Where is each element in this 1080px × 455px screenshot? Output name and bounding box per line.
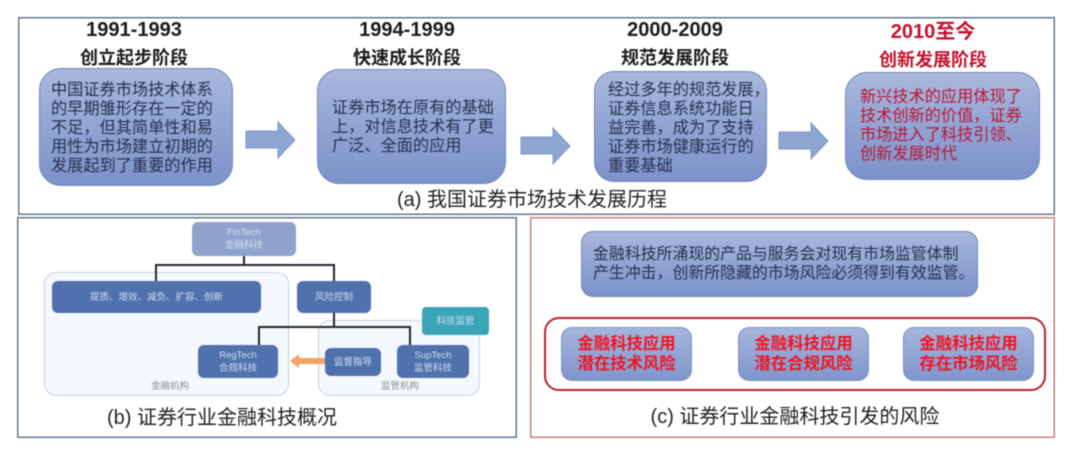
box: FinTech: FinTech	[227, 227, 261, 238]
text box: stage 3 description: 益完善，成为了支持	[608, 119, 754, 137]
heading: 1994-1999 stage: 1994-1999	[359, 19, 455, 41]
heading: 1991-1993 stage: 1991-1993	[86, 19, 182, 41]
text box: stage 1 description: 的早期雏形存在一定的	[51, 100, 213, 118]
box: RegTech: RegTech	[219, 350, 257, 360]
caption: (a): (a) 我国证券市场技术发展历程	[397, 189, 667, 211]
text box: stage 3 description	[594, 71, 767, 182]
box: RegTech	[198, 345, 278, 378]
panel: (a) securities market technology history	[18, 17, 1055, 215]
arrow: stage 3 to 4	[778, 122, 829, 160]
heading: 2010 to present stage	[878, 20, 987, 70]
box: compliance risk	[738, 327, 869, 381]
box: SupTech: 监管科技	[414, 362, 452, 374]
box: market risk: 存在市场风险	[919, 355, 1018, 373]
arrow: stage 2 to 3	[520, 126, 571, 166]
text box: stage 1 description: 不足，但其简单性和易	[51, 119, 213, 137]
heading: 1991-1993 stage	[80, 19, 188, 68]
text box: stage 3 description: 重要基础	[608, 157, 673, 175]
box: tech supervision	[422, 307, 489, 335]
box: technical risk: 潜在技术风险	[577, 355, 676, 373]
heading: 2000-2009 stage	[620, 19, 729, 68]
group: three risk boxes	[544, 317, 1046, 391]
box: supervision guidance	[325, 348, 381, 376]
text box: stage 4 description: 技术创新的价值，证券	[860, 107, 1022, 125]
heading: 2000-2009 stage: 规范发展阶段	[621, 48, 729, 68]
caption: (b): (b) 证券行业金融科技概况	[107, 407, 337, 429]
box: FinTech	[192, 222, 296, 256]
text box: stage 1 description: 用性为市场建立初期的	[51, 138, 213, 156]
text box: stage 3 description: 经过多年的规范发展，	[608, 81, 770, 99]
text box: stage 2 description: 广泛、全面的应用	[332, 137, 462, 155]
text box: stage 4 description: 市场进入了科技引领、	[860, 126, 1022, 144]
text box: stage 1 description	[39, 68, 233, 186]
caption: (c): (c) 证券行业金融科技引发的风险	[651, 406, 939, 428]
panel: (c) fintech risks	[530, 217, 1055, 438]
box: compliance risk: 金融科技应用	[754, 335, 853, 353]
text box: stage 3 description: 证券信息系统功能日	[608, 100, 754, 118]
box: RegTech: 合规科技	[219, 362, 257, 374]
box: risk control	[297, 281, 371, 313]
text box: stage 3 description: 证券市场健康运行的	[608, 138, 754, 156]
box: tech supervision: 科技监管	[436, 316, 474, 326]
text box: stage 2 description: 上，对信息技术有了更	[332, 118, 494, 136]
connectors: org chart lines	[154, 255, 412, 346]
text box: stage 1 description: 发展起到了重要的作用	[51, 157, 213, 175]
group: regulators	[318, 320, 480, 396]
group: regulators: 监管机构	[381, 381, 419, 392]
box: compliance risk: 潜在合规风险	[754, 355, 853, 373]
box: supervision guidance: 监督指导	[334, 356, 372, 368]
box: quality and efficiency: 提质、增效、减负、扩容、创新	[90, 292, 223, 302]
heading: 2000-2009 stage: 2000-2009	[627, 19, 723, 41]
heading: 2010 to present stage: 创新发展阶段	[879, 50, 987, 70]
box: SupTech: SupTech	[414, 350, 451, 360]
text box: regulation impact: 产生冲击，创新所隐藏的市场风险必须得到有效监管。	[593, 265, 974, 282]
box: SupTech	[397, 345, 469, 378]
text box: regulation impact	[581, 231, 978, 297]
text box: stage 4 description: 新兴技术的应用体现了	[860, 88, 1022, 106]
group: financial institutions	[44, 272, 289, 396]
text box: stage 2 description	[317, 69, 506, 184]
box: FinTech: 金融科技	[225, 240, 263, 251]
box: risk control: 风险控制	[315, 292, 353, 302]
box: market risk	[903, 327, 1034, 381]
heading: 1994-1999 stage: 快速成长阶段	[353, 48, 461, 68]
box: quality and efficiency	[52, 281, 261, 313]
text box: stage 4 description	[845, 72, 1040, 180]
heading: 1991-1993 stage: 创立起步阶段	[80, 48, 188, 68]
text box: regulation impact: 金融科技所涌现的产品与服务会对现有市场监管体制	[593, 246, 958, 263]
text box: stage 4 description: 创新发展时代	[860, 145, 957, 163]
heading: 2010 to present stage: 2010至今	[891, 21, 975, 43]
arrow: supervision guidance to RegTech	[290, 354, 326, 368]
box: technical risk	[561, 327, 692, 381]
box: technical risk: 金融科技应用	[577, 335, 676, 353]
panel: (b) securities industry fintech overview	[17, 217, 517, 438]
heading: 1994-1999 stage	[352, 19, 461, 68]
arrow: stage 1 to 2	[244, 120, 296, 160]
box: market risk: 金融科技应用	[919, 335, 1018, 353]
group: financial institutions: 金融机构	[151, 381, 189, 392]
text box: stage 2 description: 证券市场在原有的基础	[332, 99, 494, 117]
text box: stage 1 description: 中国证券市场技术体系	[51, 81, 213, 99]
